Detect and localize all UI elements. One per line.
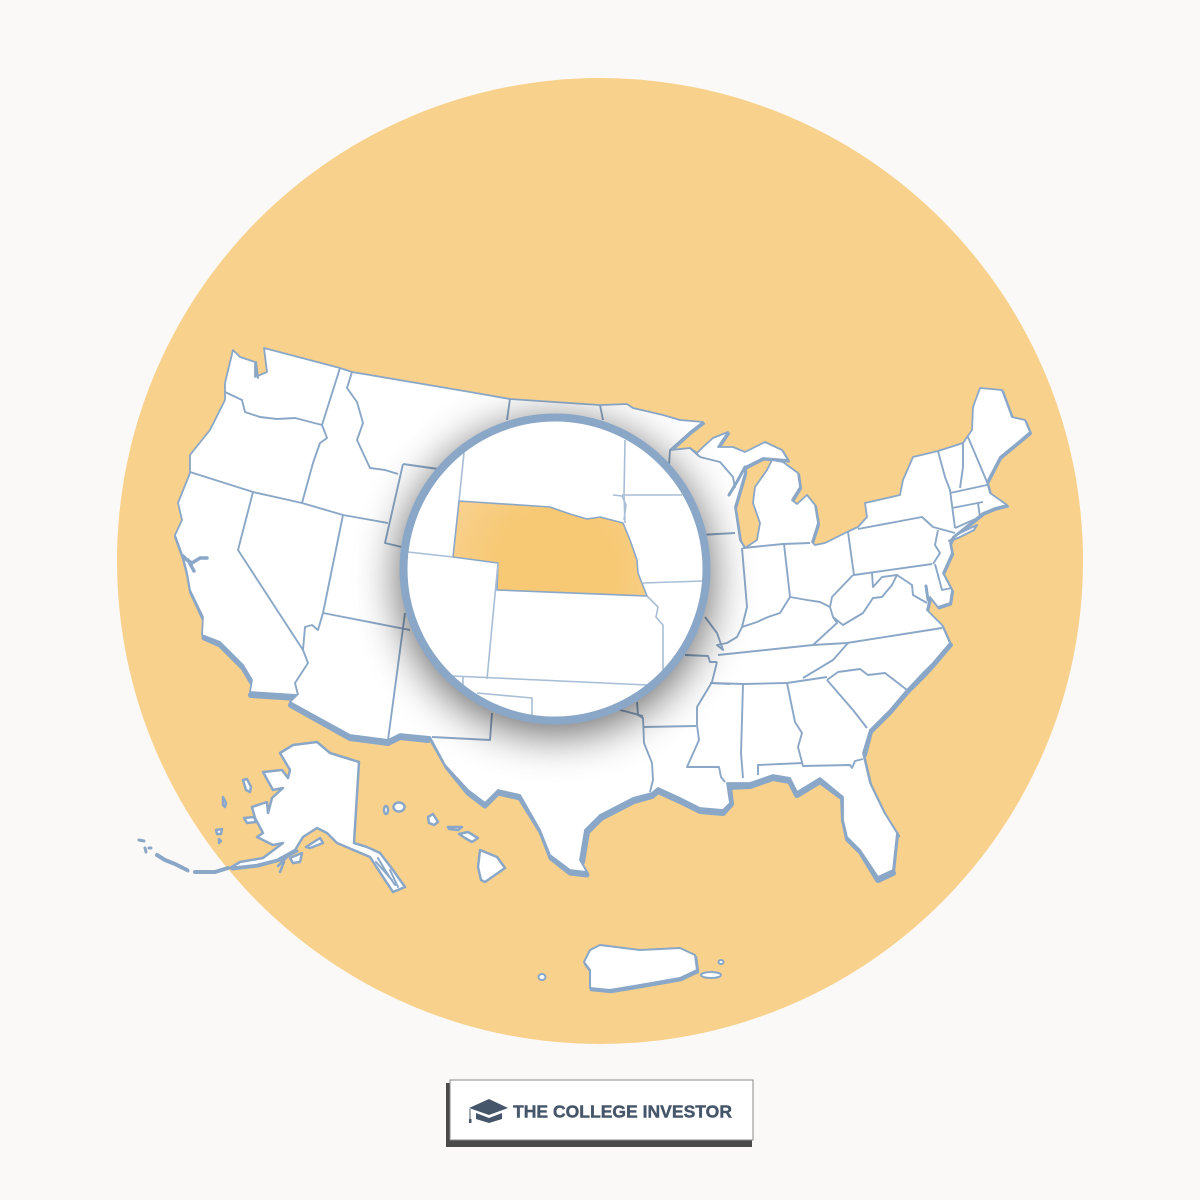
Oahu <box>428 814 438 825</box>
Big Island <box>478 850 505 882</box>
neighbouring state borders <box>408 440 703 715</box>
map: Puerto Rico <box>538 945 724 992</box>
lens ring <box>404 418 706 720</box>
logo badge <box>446 1080 753 1147</box>
land mass <box>175 348 1030 877</box>
lens background <box>404 418 706 720</box>
map: Alaska <box>139 742 405 892</box>
state: Nebraska highlighted <box>453 501 647 596</box>
icon: graduation cap <box>469 1099 508 1123</box>
zoomed map <box>408 440 703 715</box>
Puerto Rico shadow <box>585 947 698 992</box>
Alaska mainland <box>230 742 405 892</box>
map: Hawaii <box>384 802 505 882</box>
Alaska details and islands <box>139 779 398 887</box>
Puerto Rico small islands <box>538 960 724 980</box>
map: contiguous United States <box>175 348 1031 880</box>
lens shadow <box>399 422 711 734</box>
state borders <box>190 368 987 792</box>
Kauai and Niihau <box>384 802 404 814</box>
Molokai, Lanai and Maui <box>448 827 478 842</box>
orange circle backdrop <box>117 78 1083 1044</box>
coast details <box>183 362 977 600</box>
thick south coast shadow <box>176 537 951 880</box>
logo wordmark: THE COLLEGE INVESTOR <box>513 1102 732 1122</box>
Puerto Rico main island <box>584 945 697 990</box>
magnifying lens <box>399 418 711 734</box>
badge box <box>450 1080 753 1140</box>
badge shadow <box>446 1083 752 1147</box>
coast shadow <box>176 350 1031 878</box>
